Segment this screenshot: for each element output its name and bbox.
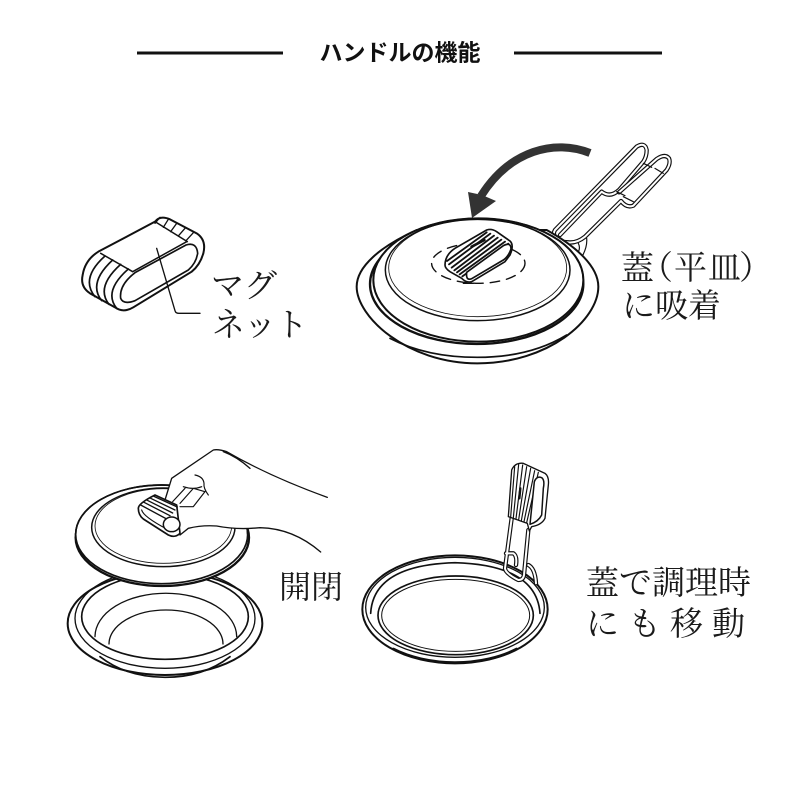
label: magnet [211, 269, 306, 344]
label: sticks to lid or plate: 平 [674, 251, 707, 287]
dashed magnet zone [432, 243, 525, 283]
label: can move with lid while cooking: にも移動 [586, 606, 754, 643]
label: sticks to lid or plate: に吸着 [622, 289, 721, 325]
arrow: curved pointing to lid [468, 147, 590, 218]
illustration: lid being opened [76, 485, 249, 586]
illustration: lid stuck on plate with handle [357, 218, 598, 363]
illustration: magnet handle [82, 217, 204, 313]
leader line [157, 248, 200, 313]
plate [357, 230, 598, 363]
label: open and close: 開閉 [279, 569, 343, 605]
thumb [163, 517, 180, 532]
label: magnet: マグ [211, 269, 277, 305]
title: handle functions: ハンドルの機能 [320, 40, 480, 66]
label: can move with lid while cooking: 蓋で調理時 [586, 565, 751, 602]
label: can move with lid while cooking [586, 565, 754, 643]
label: sticks to lid or plate: （ [640, 251, 673, 287]
label: sticks to lid or plate: 皿 [708, 251, 741, 287]
illustration: pan with handle standing upright [362, 555, 548, 663]
hand fill [163, 450, 327, 552]
small handle [138, 495, 180, 536]
illustration: lower bowl [68, 568, 262, 677]
illustration: hand holding handle [138, 450, 327, 552]
label: sticks to lid or plate: 蓋 [621, 250, 654, 287]
illustration: folded wire handle behind plate [554, 145, 670, 260]
lid [370, 218, 583, 344]
lid handle [445, 229, 512, 283]
label: sticks to lid or plate [621, 250, 772, 325]
label: magnet: ネット [212, 308, 306, 344]
hand outline [165, 450, 327, 552]
title: handle functions [137, 40, 662, 66]
label: sticks to lid or plate: ） [739, 251, 772, 287]
upright handle [505, 463, 549, 583]
